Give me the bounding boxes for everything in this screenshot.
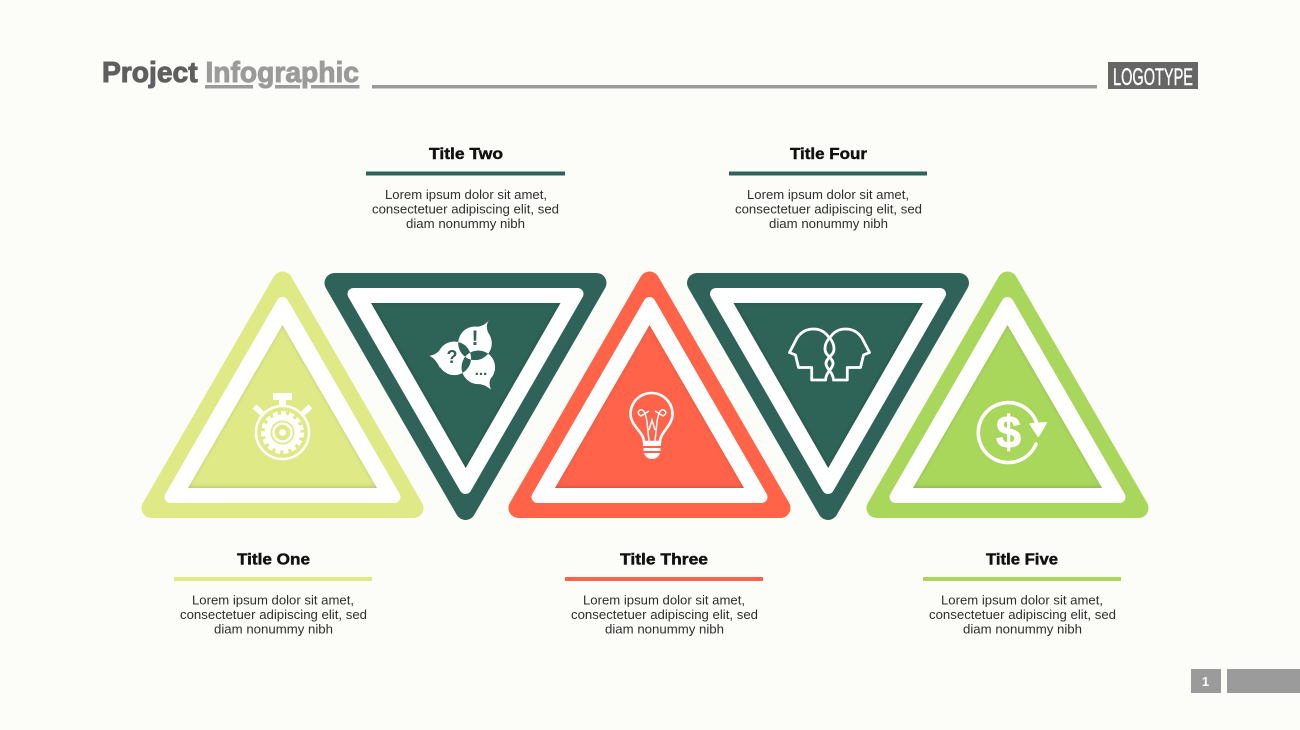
panel: title four text: [729, 146, 927, 231]
header rule: [372, 85, 1097, 88]
panel: title five text: Lorem ipsum dolor sit amet,: [941, 592, 1103, 608]
panel: triangle two: [334, 283, 596, 510]
panel: triangle five: [876, 282, 1138, 508]
panel: title five text: diam nonummy nibh: [963, 622, 1082, 636]
panel: title two text: diam nonummy nibh: [406, 216, 525, 231]
panel: triangle one: [152, 282, 414, 508]
icon: speech bubbles: !: [472, 327, 478, 350]
icon: speech bubbles: [430, 320, 495, 390]
icon: stopwatch gear: [254, 393, 310, 459]
panel: title four text: Title Four: [790, 146, 867, 163]
footer bar: [1227, 669, 1300, 693]
panel: title four text: Lorem ipsum dolor sit amet,: [747, 187, 909, 202]
title: Project Infographic: [102, 57, 359, 89]
panel: title three text: consectetuer adipiscing elit, sed: [571, 607, 758, 622]
panel: title one text: consectetuer adipiscing elit, sed: [180, 607, 367, 622]
panel: triangle four: [697, 283, 959, 510]
panel: title one text: Lorem ipsum dolor sit amet,: [192, 592, 354, 608]
panel: title three text: diam nonummy nibh: [605, 622, 724, 636]
panel: title two text: [366, 146, 565, 231]
panel: title two text: Lorem ipsum dolor sit amet,: [385, 187, 547, 202]
panel: title five text: [923, 552, 1121, 636]
panel: title one text: Title One: [237, 552, 310, 568]
panel: triangle three: [518, 282, 780, 508]
icon: light bulb: [630, 393, 672, 459]
panel: title four text: consectetuer adipiscing elit, sed: [735, 202, 922, 216]
icon: dollar cycle: $: [996, 406, 1021, 458]
page number: 1: [1202, 674, 1209, 689]
panel: title one text: [174, 552, 372, 636]
icon: speech bubbles: ...: [475, 362, 487, 379]
panel: title three text: [565, 552, 763, 636]
logotype: [1108, 62, 1198, 91]
page number: [1191, 669, 1221, 693]
panel: title four text: diam nonummy nibh: [769, 216, 888, 231]
panel: title one text: diam nonummy nibh: [214, 622, 333, 636]
panel: title five text: Title Five: [986, 552, 1058, 568]
panel: title three text: Lorem ipsum dolor sit amet,: [583, 592, 745, 608]
logotype: LOGOTYPE: [1113, 64, 1193, 91]
icon: dollar cycle: [978, 403, 1046, 463]
panel: title two text: consectetuer adipiscing elit, sed: [372, 202, 559, 216]
icon: speech bubbles: ?: [446, 347, 458, 367]
panel: title three text: Title Three: [620, 552, 708, 568]
icon: two heads: [790, 329, 870, 380]
panel: title five text: consectetuer adipiscing elit, sed: [929, 607, 1116, 622]
panel: title two text: Title Two: [429, 146, 503, 163]
